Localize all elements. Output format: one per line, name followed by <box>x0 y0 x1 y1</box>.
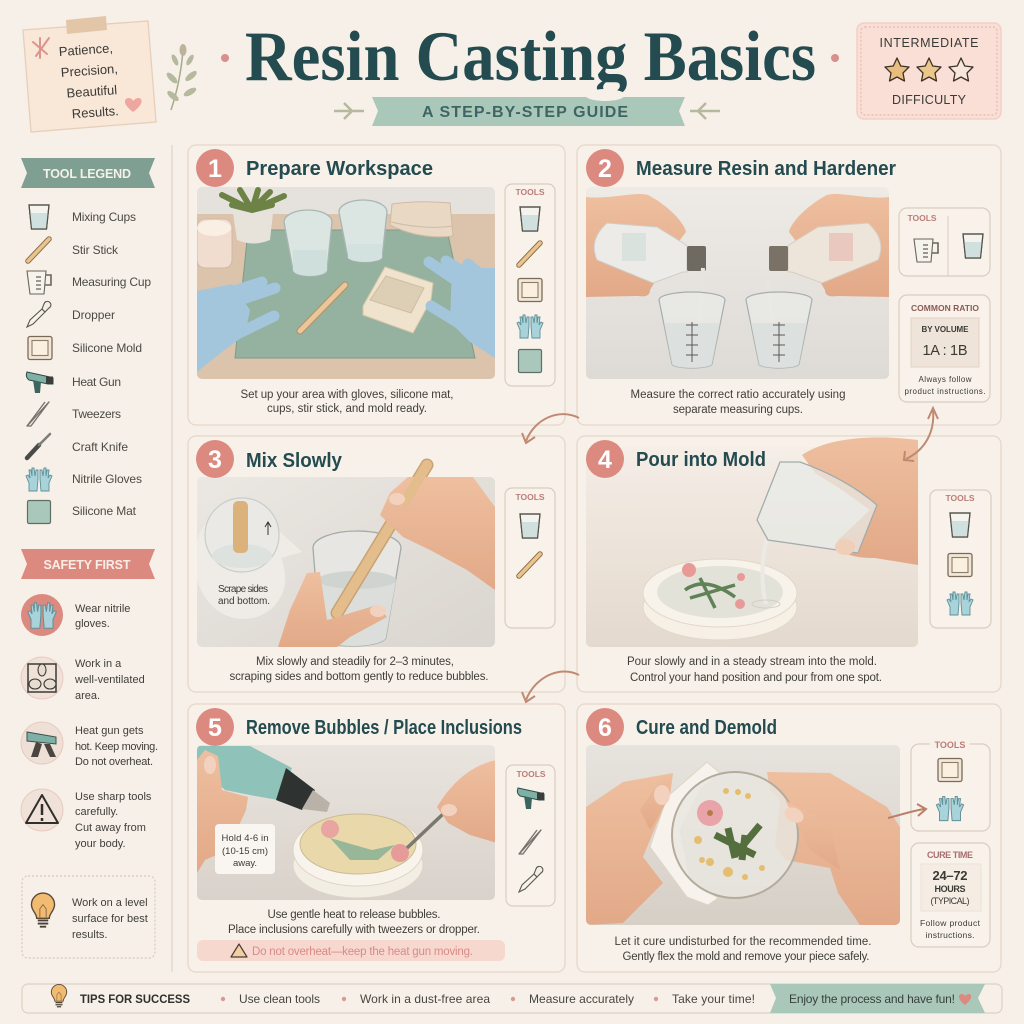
caption 4: Pour slowly and in a steady stream into the mold. <box>627 656 877 668</box>
photo: bubbles and inclusions <box>197 745 497 900</box>
difficulty badge: DIFFICULTY <box>892 93 967 107</box>
difficulty badge: INTERMEDIATE <box>880 36 978 50</box>
caption 3: scraping sides and bottom gently to reduce bubbles. <box>230 671 488 683</box>
tools box 5 <box>506 765 555 906</box>
safety ribbon <box>21 549 155 579</box>
caption 6 <box>614 936 872 963</box>
legend: dropper <box>27 301 115 327</box>
heat gun distance note: Hold 4-6 in <box>222 833 268 844</box>
note text <box>58 40 121 122</box>
safety: heat gun: Heat gun gets <box>75 725 144 737</box>
tools box 1 <box>505 184 555 386</box>
safety: ventilation <box>21 657 145 702</box>
heart <box>125 98 142 112</box>
tips list: Measure accurately <box>529 992 634 1006</box>
tip box: Work on a level <box>72 897 148 909</box>
photo: workspace <box>197 187 495 379</box>
legend: mixing cups <box>29 205 136 229</box>
tools box 5: TOOLS <box>516 769 546 779</box>
legend: craft knife: Craft Knife <box>72 440 128 454</box>
heading 4: Pour into Mold <box>636 449 766 471</box>
cure time box <box>911 843 990 947</box>
step number 5: 5 <box>208 714 222 742</box>
step number 1 <box>196 149 234 187</box>
safety: heat gun <box>21 722 158 768</box>
tools box 6: TOOLS <box>935 740 965 750</box>
legend: stir stick <box>28 239 119 261</box>
legend ribbon: TOOL LEGEND <box>43 167 131 181</box>
note paper <box>23 21 156 132</box>
legend: heat gun: Heat Gun <box>72 375 121 389</box>
tip box: surface for best <box>72 913 148 925</box>
step number 4 <box>586 440 624 478</box>
arrow: step 2 to step 3 <box>522 414 579 443</box>
note text: Precision, <box>60 61 118 80</box>
note text: Results. <box>71 103 119 121</box>
caption 5 <box>228 909 480 936</box>
note text: Patience, <box>58 40 113 59</box>
closing ribbon <box>770 984 985 1013</box>
common ratio box: BY VOLUME <box>922 325 969 334</box>
safety: sharp tools: carefully. <box>75 806 118 818</box>
photo: pouring <box>586 437 918 647</box>
step number 4: 4 <box>598 446 612 474</box>
photo: measuring <box>586 187 889 379</box>
arrow: photo to tools <box>888 804 926 818</box>
heat gun distance note: (10-15 cm) <box>222 846 268 857</box>
legend: silicone mold: Silicone Mold <box>72 341 142 355</box>
safety: sharp tools: Use sharp tools <box>75 791 152 803</box>
arrow: step 4 to step 5 <box>522 671 579 702</box>
panel: step 6 <box>577 704 1001 972</box>
legend: heat gun <box>26 372 121 393</box>
safety: gloves: gloves. <box>75 618 110 630</box>
left hand and bottle <box>586 194 706 297</box>
step number 3: 3 <box>208 446 222 474</box>
panel: step 4 <box>577 436 1001 692</box>
safety: heat gun: Do not overheat. <box>75 756 153 768</box>
legend: measuring cup: Measuring Cup <box>72 275 151 289</box>
legend: silicone mold <box>28 336 142 360</box>
caption 3: Mix slowly and steadily for 2–3 minutes, <box>256 656 454 668</box>
closing ribbon: Enjoy the process and have fun! <box>789 992 955 1006</box>
warning band: Do not overheat—keep the heat gun moving. <box>252 946 473 958</box>
caption 4 <box>627 656 882 684</box>
tools box 2: TOOLS <box>907 213 937 223</box>
caption 4: Control your hand position and pour from one spot. <box>630 672 882 684</box>
safety: sharp tools: Cut away from <box>75 822 146 834</box>
common ratio box <box>899 295 990 402</box>
heat gun distance note <box>215 824 275 874</box>
safety: ventilation: Work in a <box>75 658 122 670</box>
legend: nitrile gloves <box>26 468 142 491</box>
tips list <box>221 992 755 1006</box>
caption 5: Use gentle heat to release bubbles. <box>268 909 440 921</box>
caption 6: Let it cure undisturbed for the recommended time. <box>614 936 872 948</box>
inset: scrape sides: and bottom. <box>218 596 270 607</box>
panel: step 5 <box>188 704 565 972</box>
tape <box>66 16 107 34</box>
heading 6: Cure and Demold <box>636 717 777 739</box>
tools box 3 <box>505 488 555 628</box>
caption 2: separate measuring cups. <box>673 404 803 416</box>
cure time box: instructions. <box>926 930 974 940</box>
arrow: ratio to pour <box>904 408 938 461</box>
tips bulb icon <box>51 984 67 1007</box>
cure time box: CURE TIME <box>927 850 973 860</box>
cure time box: (TYPICAL) <box>930 896 970 906</box>
tips for success bar <box>22 984 1002 1013</box>
legend: tweezers: Tweezers <box>72 407 121 421</box>
step number 2 <box>586 149 624 187</box>
safety: ventilation: well-ventilated <box>74 674 145 686</box>
photo: mixing <box>197 465 495 647</box>
photo: demolding <box>586 745 900 925</box>
step number 6 <box>586 708 624 746</box>
safety ribbon: SAFETY FIRST <box>44 558 131 572</box>
note text: Beautiful <box>66 82 118 101</box>
legend: craft knife <box>27 434 128 458</box>
tools box 6 <box>911 738 990 831</box>
tools box 4 <box>930 490 991 628</box>
tip box <box>22 876 155 958</box>
tools box 1: TOOLS <box>515 187 545 197</box>
common ratio box: product instructions. <box>904 387 986 396</box>
caption 2 <box>630 389 846 416</box>
tip box: results. <box>72 929 107 941</box>
caption 6: Gently flex the mold and remove your piece safely. <box>622 951 870 963</box>
legend: tweezers <box>27 402 121 426</box>
safety: gloves: Wear nitrile <box>75 603 130 615</box>
step number 6: 6 <box>598 714 612 742</box>
common ratio box: COMMON RATIO <box>911 303 979 313</box>
step number 5 <box>196 708 234 746</box>
sticky note <box>23 16 156 132</box>
inset: scrape sides: Scrape sides <box>218 584 268 595</box>
leaf sprig <box>165 44 198 110</box>
cure time box: HOURS <box>934 884 966 894</box>
title: Resin Casting Basics <box>245 18 816 96</box>
tools box 4: TOOLS <box>945 493 975 503</box>
panel: step 3 <box>188 436 565 692</box>
cure time box: 24–72 <box>932 868 968 883</box>
panel: step 1 <box>188 145 565 425</box>
heading 5: Remove Bubbles / Place Inclusions <box>246 717 522 739</box>
cure time box: Follow product <box>920 918 981 928</box>
tools box 2 <box>899 208 990 276</box>
panel: step 2 <box>577 145 1001 425</box>
legend: stir stick: Stir Stick <box>72 243 119 257</box>
legend: nitrile gloves: Nitrile Gloves <box>72 472 142 486</box>
right hand and bottle <box>769 194 889 297</box>
legend: measuring cup <box>27 271 151 294</box>
tips heading: TIPS FOR SUCCESS <box>80 992 190 1006</box>
heat gun distance note: away. <box>233 858 257 869</box>
stars <box>885 58 973 81</box>
inset: scrape sides <box>197 498 302 619</box>
caption 5: Place inclusions carefully with tweezers or dropper. <box>228 924 480 936</box>
subtitle ribbon: A STEP-BY-STEP GUIDE <box>422 104 628 121</box>
tool legend <box>21 158 155 524</box>
legend ribbon <box>21 158 155 188</box>
sidebar divider <box>171 145 173 972</box>
legend: silicone mat: Silicone Mat <box>72 504 137 518</box>
safety: heat gun: hot. Keep moving. <box>75 741 158 753</box>
note doodle <box>33 38 49 58</box>
legend: dropper: Dropper <box>72 308 115 322</box>
caption 1 <box>240 389 454 415</box>
safety: ventilation: area. <box>75 690 100 702</box>
common ratio box: 1A : 1B <box>922 343 968 359</box>
tools box 3: TOOLS <box>515 492 545 502</box>
tips list: Use clean tools <box>239 992 320 1006</box>
step number 3 <box>196 440 234 478</box>
legend: silicone mat <box>28 500 137 524</box>
safety: gloves <box>21 594 130 636</box>
caption 1: Set up your area with gloves, silicone mat, <box>240 389 454 401</box>
tips list: Work in a dust-free area <box>360 992 490 1006</box>
difficulty badge <box>857 23 1001 119</box>
tips list: Take your time! <box>672 992 755 1006</box>
warning band <box>197 940 505 961</box>
safety: sharp tools <box>21 789 152 850</box>
caption 2: Measure the correct ratio accurately using <box>630 389 846 401</box>
caption 1: cups, stir stick, and mold ready. <box>267 403 427 415</box>
step number 2: 2 <box>598 155 612 183</box>
step number 1: 1 <box>208 155 222 183</box>
legend: mixing cups: Mixing Cups <box>72 210 136 224</box>
safety first <box>21 549 158 958</box>
caption 3 <box>230 656 488 683</box>
heading 2: Measure Resin and Hardener <box>636 158 896 180</box>
heading 1: Prepare Workspace <box>246 158 433 180</box>
common ratio box: Always follow <box>918 375 972 384</box>
heading 3: Mix Slowly <box>246 450 343 472</box>
safety: sharp tools: your body. <box>75 838 126 850</box>
subtitle ribbon <box>334 89 720 126</box>
